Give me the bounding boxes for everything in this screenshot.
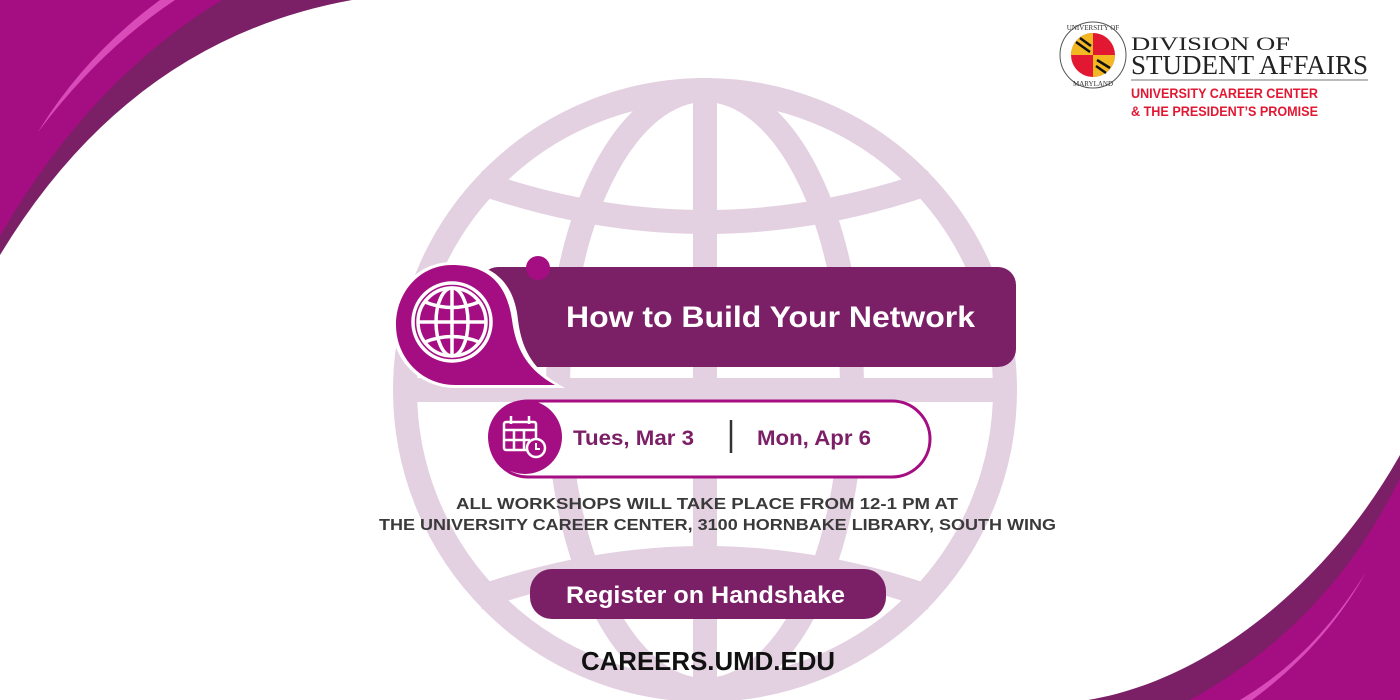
location text: ALL WORKSHOPS WILL TAKE PLACE FROM 12-1 PM AT (456, 496, 958, 513)
date 2: Mon, Apr 6 (757, 427, 871, 450)
title banner (392, 256, 1016, 388)
decoration: bottom-right swoosh (1088, 455, 1400, 700)
seal: MARYLAND (1073, 80, 1113, 88)
date pill (488, 400, 930, 477)
website: CAREERS.UMD.EDU (581, 646, 835, 676)
logo (1060, 22, 1368, 119)
background globe (405, 90, 1005, 690)
register button: Register on Handshake (566, 582, 845, 609)
speech bubble with globe icon (392, 262, 565, 388)
logo: UNIVERSITY CAREER CENTER (1131, 86, 1318, 101)
seal: UNIVERSITY OF (1067, 24, 1119, 32)
location text (379, 496, 1056, 534)
calendar icon (488, 400, 562, 474)
logo: STUDENT AFFAIRS (1131, 50, 1368, 80)
decoration: top-left swoosh (0, 0, 352, 255)
logo: DIVISION OF (1131, 34, 1290, 55)
title text: How to Build Your Network (566, 301, 975, 334)
decorative dot (526, 256, 550, 280)
location text: THE UNIVERSITY CAREER CENTER, 3100 HORNBAKE LIBRARY, SOUTH WING (379, 517, 1056, 534)
seal (1060, 22, 1126, 88)
register button (530, 569, 886, 619)
logo: & THE PRESIDENT’S PROMISE (1131, 104, 1318, 119)
date 1: Tues, Mar 3 (573, 427, 694, 450)
